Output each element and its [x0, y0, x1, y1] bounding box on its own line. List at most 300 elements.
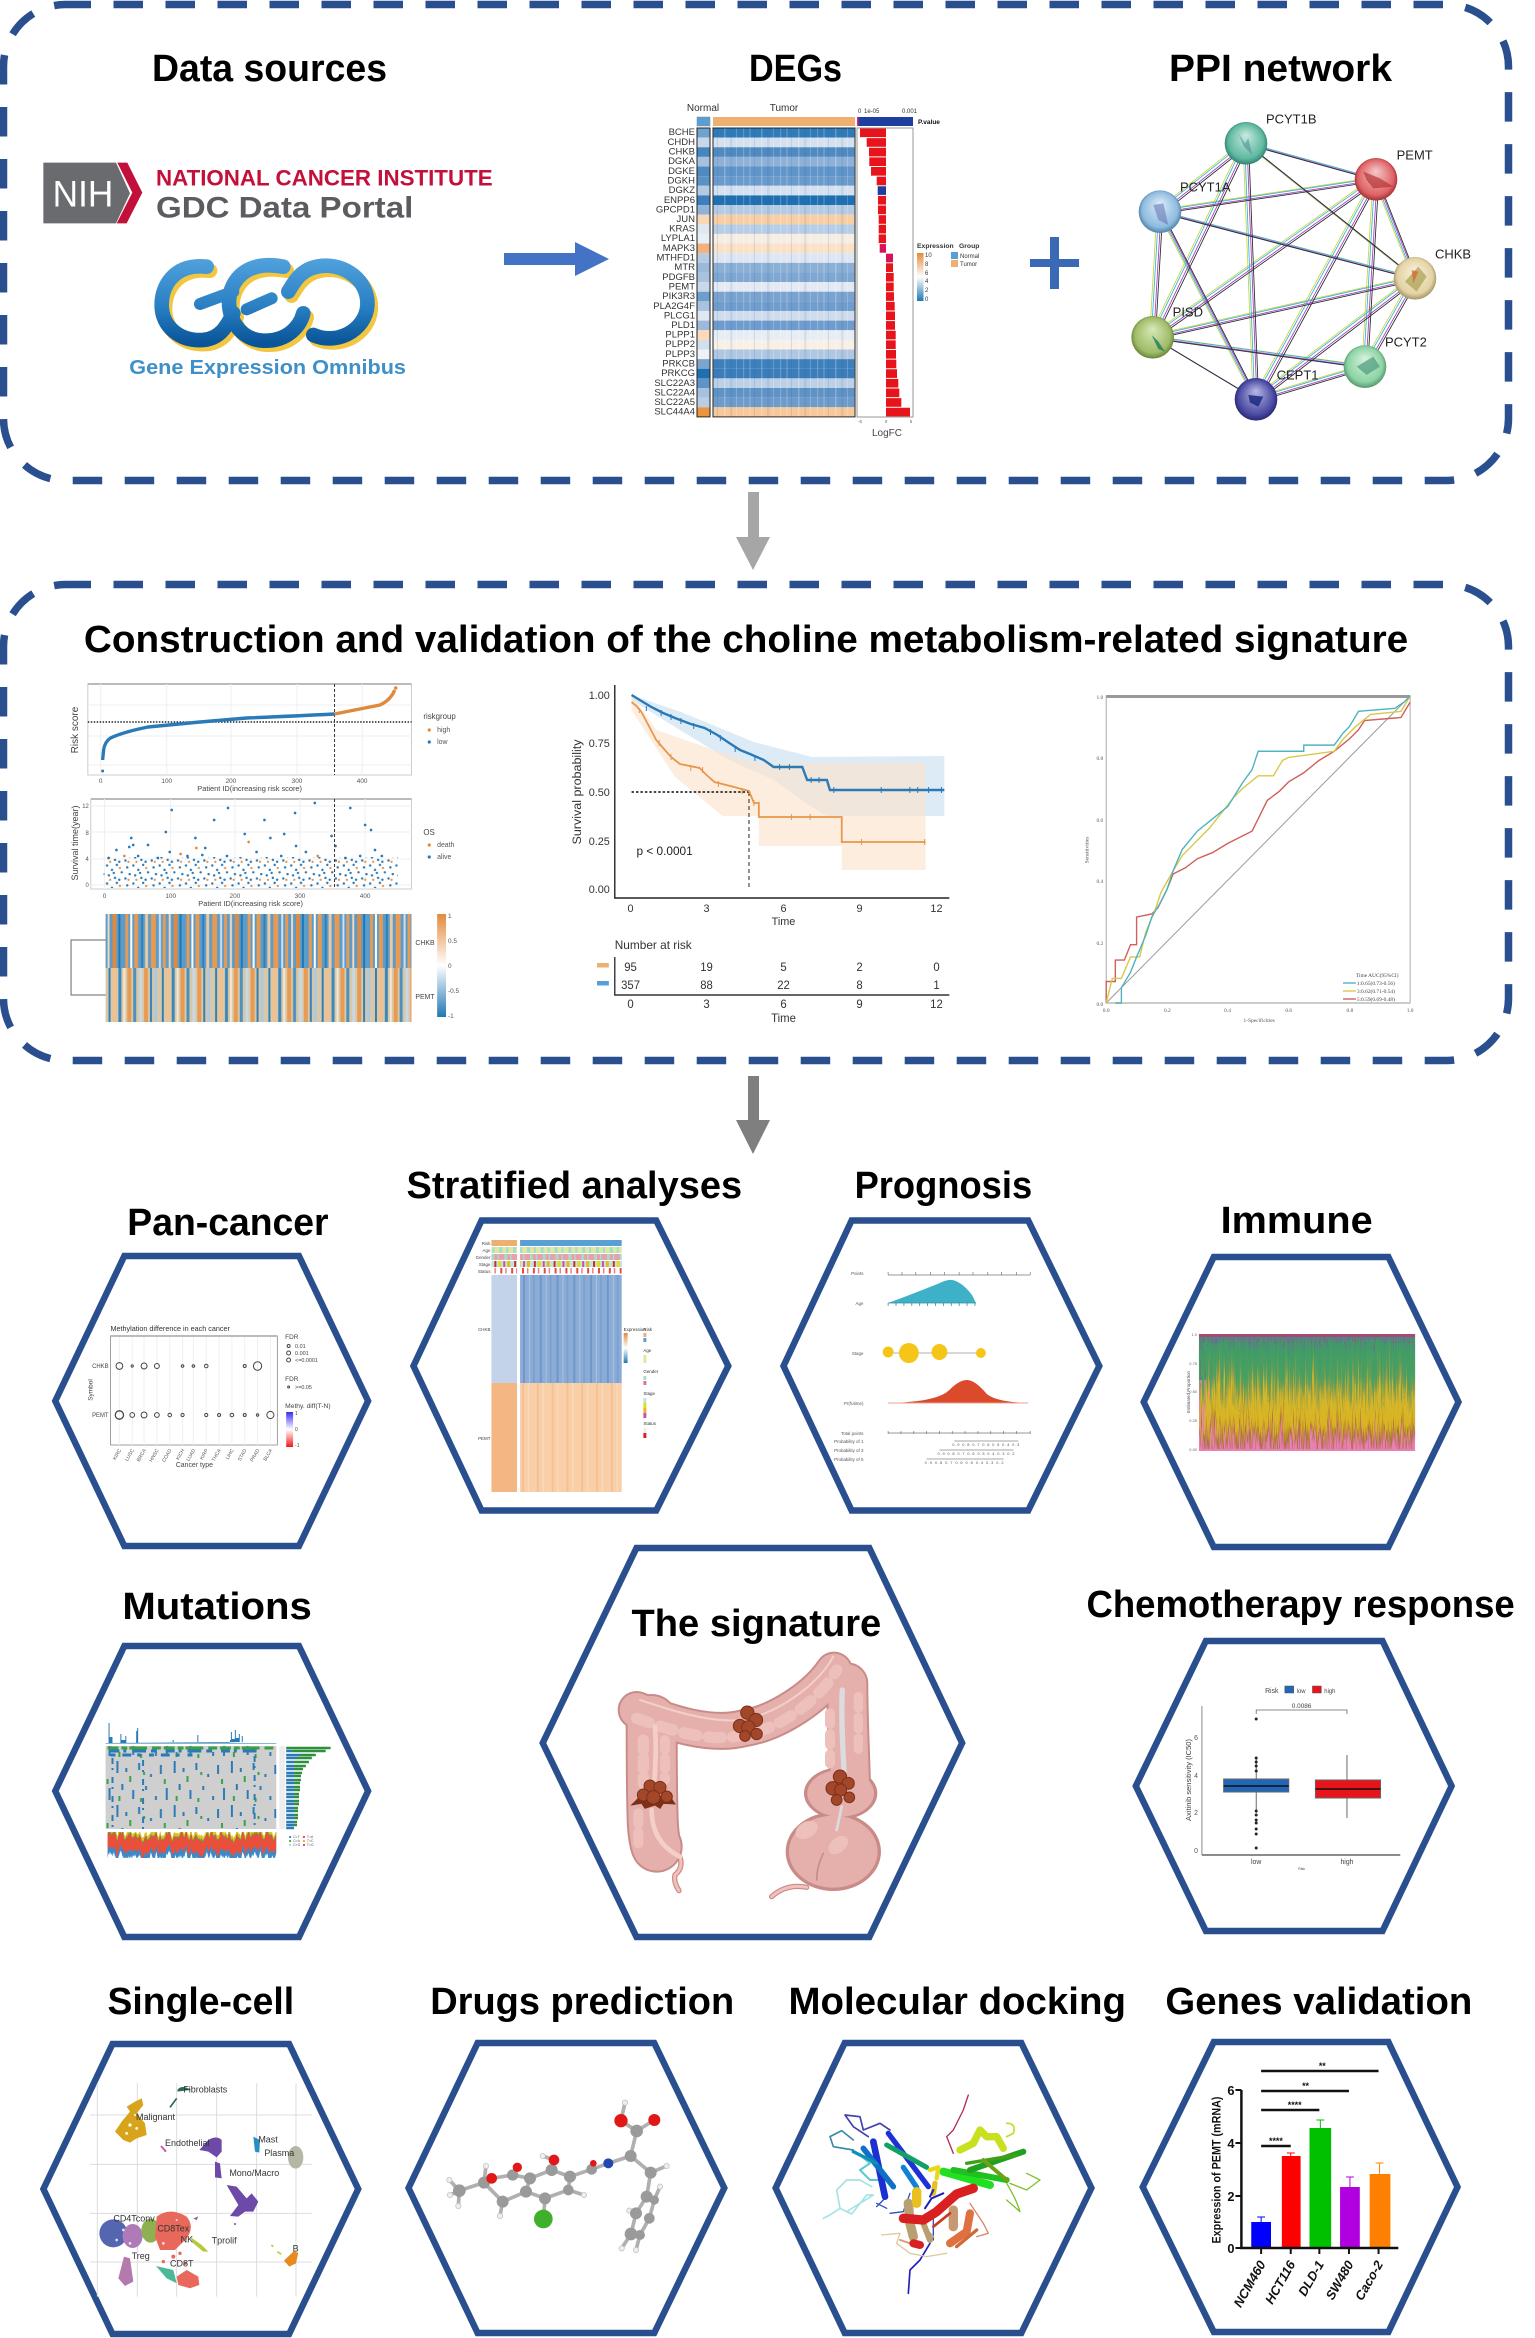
LogFC bars: 5: [910, 419, 913, 424]
chart: PEMT expression bars: 0: [1227, 2241, 1234, 2256]
cluster labels: B: [293, 2244, 299, 2254]
chart: survival time scatter: 200: [230, 893, 241, 900]
chart: methylation bubble plot: COAD: [161, 1448, 174, 1463]
chart: stratified heatmap: Risk: [482, 1241, 491, 1246]
panel: stratified analyses: [407, 1164, 742, 1510]
chart: immune infiltration stacked bars: [1186, 1334, 1416, 1451]
logo: GEO Gene Expression Omnibus: Gene Expression Omnibus: [129, 356, 406, 379]
chart: PEMT expression bars: 4: [1227, 2136, 1235, 2151]
P value bar: [857, 109, 940, 126]
chart: nomogram: Stage: [852, 1351, 864, 1356]
node labels: PCYT1A: [1180, 180, 1231, 195]
chart: stratified heatmap: Stage: [479, 1262, 491, 1267]
chart: risk score curve: 0: [99, 778, 103, 785]
bubble legend: 0: [295, 1427, 298, 1433]
heatmap legend: Age: [643, 1348, 652, 1353]
LogFC bars: -5: [858, 419, 862, 424]
chart: survival time scatter: 12: [82, 804, 89, 810]
chart: Kaplan-Meier survival curve: 0: [628, 903, 634, 915]
table: number at risk: 8: [856, 980, 863, 992]
logo: GEO Gene Expression Omnibus: [129, 265, 406, 379]
cluster labels: [113, 2085, 299, 2269]
chart: ROC curves: 1-Specificities: [1244, 1017, 1275, 1024]
chart: Kaplan-Meier survival curve: 0.25: [589, 836, 610, 848]
gene row labels: SLC44A4: [654, 406, 695, 418]
node labels: PCYT2: [1385, 335, 1427, 350]
heading: the signature: The signature: [632, 1602, 881, 1644]
chart: oncoplot: T>A: [307, 1835, 314, 1839]
hydrogen atoms: [447, 2100, 669, 2253]
gene row labels: BCHE: [669, 127, 695, 138]
panel: the signature: [543, 1548, 962, 1937]
panel: chemotherapy response: [1086, 1583, 1515, 1931]
cluster labels: Mono/Macro: [229, 2168, 279, 2178]
table: number at risk: 6: [780, 999, 787, 1011]
tumours: [632, 1706, 855, 1808]
chart: ROC curves: 0.8: [1347, 1008, 1354, 1014]
chart: risk score curve: Patient ID(increasing risk score): [197, 784, 303, 793]
heading: construction and validation: Construction and validation of the choline metabolism-related signature: [84, 618, 1408, 660]
cluster labels: NK: [181, 2234, 193, 2244]
chart: PEMT expression bars: [1210, 2061, 1398, 2310]
bubble legend: 1: [295, 1411, 298, 1417]
chart: PEMT expression bars: HCT116: [1262, 2257, 1299, 2307]
heatmap legend: [917, 243, 979, 303]
chart: Kaplan-Meier survival curve: [570, 685, 949, 928]
chart: ROC curves: 3:0.62(0.71-0.54): [1357, 988, 1395, 995]
chart: immune infiltration stacked bars: Estimated Proportion: [1186, 1370, 1191, 1413]
heading: DEGs: DEGs: [749, 48, 842, 90]
chart: ROC curves: 1.0: [1096, 695, 1104, 701]
chart: Kaplan-Meier survival curve: 0.00: [589, 884, 610, 896]
heatmap legend: Tumor: [960, 262, 977, 268]
chart: risk score curve: riskgroup: [423, 712, 456, 721]
icon: colon with tumours: [632, 1657, 881, 1897]
cluster labels: Tprolif: [212, 2235, 237, 2245]
heatmap rows: [697, 128, 855, 417]
heatmap annotation: Normal: [687, 103, 719, 114]
panel: molecular docking: [776, 1980, 1126, 2333]
bubble legend: Methy. diff(T-N): [285, 1403, 331, 1410]
chart: methylation bubble plot: PRAD: [249, 1448, 261, 1463]
chart: risk score curve: Risk score: [70, 706, 81, 753]
node labels: CEPT1: [1277, 367, 1319, 382]
helices: tan and yellow: [908, 2203, 913, 2237]
chart: methylation bubble plot: LUSC: [124, 1448, 136, 1463]
chart: immune infiltration stacked bars: 0.50: [1189, 1389, 1198, 1394]
chart: ROC curves: 0.4: [1096, 879, 1104, 885]
chart: survival time scatter: 4: [86, 857, 89, 863]
chart: Kaplan-Meier survival curve: 0.50: [589, 787, 610, 799]
chart: stratified heatmap: CHKB: [478, 1327, 490, 1332]
gene row labels: DGKZ: [669, 185, 695, 196]
gene row labels: [653, 127, 696, 418]
chart: oncoplot: T>G: [307, 1843, 314, 1847]
chart: methylation bubble plot: [88, 1326, 331, 1469]
haustra highlights: [637, 1670, 858, 1858]
gene row labels: DGKA: [668, 156, 696, 167]
table: number at risk: 95: [624, 962, 637, 974]
chart: gene expression heatmap: -0.5: [448, 988, 459, 995]
chart: gene expression heatmap: [71, 913, 459, 1022]
bubble legend: >=0.05: [295, 1385, 312, 1391]
gene row labels: PIK3R3: [662, 291, 695, 302]
table: number at risk: 12: [930, 999, 943, 1011]
chart: ROC curves: 1.0: [1407, 1008, 1414, 1014]
gene row labels: MTR: [674, 262, 695, 273]
myeloid cluster: [199, 2137, 258, 2225]
chart: drug sensitivity boxplot: 2: [1194, 1810, 1198, 1817]
LogFC bars: 0: [885, 419, 888, 424]
chart: immune infiltration stacked bars: 1.0: [1191, 1332, 1198, 1337]
chart: survival time scatter: OS: [423, 828, 435, 837]
chart: drug sensitivity boxplot: 0: [1194, 1848, 1198, 1855]
panel: pan-cancer: [55, 1201, 368, 1546]
chart: methylation bubble plot: LIHC: [225, 1448, 236, 1461]
chart: risk score curve: 300: [292, 778, 303, 785]
top mutation burden bars: [106, 1723, 253, 1743]
chart: risk score curve: high: [437, 727, 450, 734]
panel contents: [70, 618, 1414, 1025]
chart: stratified heatmap: Age: [483, 1248, 491, 1253]
chart: nomogram: 0.9 0.8 0.7 0.6 0.5 0.4 0.3 0.2: [937, 1451, 1014, 1456]
icon: ball-and-stick molecule: [447, 2100, 669, 2253]
node labels: PISD: [1173, 305, 1203, 320]
gene row labels: CHKB: [669, 146, 695, 158]
heatmap legend: 10: [925, 253, 932, 259]
chart: ROC curves: 0.6: [1096, 818, 1104, 824]
heatmap legend: 4: [925, 279, 929, 285]
chart: ROC curves: 0.0: [1103, 1008, 1110, 1014]
gene row labels: PDGFB: [662, 272, 695, 283]
gene row labels: SLC22A3: [654, 378, 695, 389]
chart: ROC curves: Sensitivities: [1084, 837, 1090, 863]
chart: Kaplan-Meier survival curve: 3: [704, 903, 710, 915]
panel: single-cell: [43, 1980, 358, 2334]
bubble legend: FDR: [285, 1334, 299, 1341]
table: number at risk: 88: [700, 980, 713, 992]
P value bar: 0: [858, 109, 862, 115]
chart: oncoplot: [99, 1723, 331, 1858]
chart: PEMT expression bars: ****: [1288, 2100, 1302, 2110]
chart: ROC curves: 1:0.65(0.73-0.56): [1357, 980, 1395, 987]
ligand: [925, 2190, 943, 2208]
chart: ROC curves: 0.4: [1224, 1008, 1231, 1014]
heatmap legend: 2: [925, 288, 929, 294]
table: number at risk: 1: [933, 980, 940, 992]
gene row labels: MAPK3: [663, 243, 695, 254]
arrow: first panel to second panel: [736, 492, 770, 570]
bubble legend: 0.001: [295, 1351, 309, 1357]
chart: PEMT expression bars: SW480: [1323, 2257, 1357, 2302]
gene row labels: SLC22A4: [654, 388, 695, 398]
chart: stratified heatmap: Gender: [476, 1255, 491, 1260]
bubble legend: [285, 1334, 331, 1449]
gene row labels: PEMT: [669, 282, 695, 292]
chart: Kaplan-Meier survival curve: 12: [930, 903, 943, 915]
chart: drug sensitivity boxplot: Risk: [1298, 1867, 1305, 1871]
chart: ROC curves: 0.0: [1096, 1002, 1104, 1008]
gene row labels: PLPP1: [665, 330, 695, 340]
table: number at risk: 0: [933, 962, 940, 974]
table: number at risk: 19: [700, 962, 713, 974]
chart: gene expression heatmap: CHKB: [415, 940, 435, 947]
chart: methylation bubble plot: CHKB: [92, 1364, 109, 1370]
chart: oncoplot: C>T: [293, 1835, 301, 1839]
chart: drug sensitivity boxplot: high: [1340, 1859, 1354, 1866]
chart: survival time scatter: alive: [437, 854, 451, 861]
bonds: [449, 2103, 667, 2250]
arrow: data sources to DEGs: [504, 242, 609, 276]
gene row labels: SLC22A5: [654, 397, 695, 408]
panel: genes validation: [1143, 1980, 1472, 2332]
gene row labels: PLA2G4F: [653, 301, 695, 312]
chart: drug sensitivity boxplot: [1184, 1686, 1400, 1871]
colon body: [637, 1671, 878, 1888]
variant proportions: [99, 1832, 286, 1858]
chart: oncoplot: C>G: [293, 1843, 301, 1847]
chart: methylation bubble plot: KIRC: [112, 1448, 123, 1461]
chart: nomogram: Points: [851, 1271, 864, 1276]
chart: stratified heatmap: [476, 1240, 659, 1492]
chart: drug sensitivity boxplot: 4: [1194, 1773, 1198, 1780]
chart: ROC curves: 0.6: [1285, 1008, 1292, 1014]
gene row labels: MTHFD1: [656, 252, 695, 264]
chart: PEMT expression bars: Expression of PEMT (mRNA): [1210, 2096, 1224, 2244]
LogFC bars: [857, 128, 913, 439]
chart: ROC curves: Time AUC(95%CI): [1356, 972, 1399, 979]
beta strands: blue domain: [888, 2133, 928, 2187]
chart: survival time scatter: 0: [103, 893, 107, 900]
chart: survival time scatter: 8: [86, 831, 89, 837]
chart: Kaplan-Meier survival curve: p < 0.0001: [636, 844, 693, 858]
gene row labels: DGKE: [668, 166, 695, 177]
chart: risk score curve: low: [437, 739, 448, 746]
chart: nomogram: 0.9 0.8 0.7 0.6 0.5 0.4 0.3: [952, 1442, 1020, 1447]
cluster labels: Plasma: [264, 2148, 294, 2158]
logo: NIH GDC Data Portal: NIH: [53, 173, 113, 215]
chart: survival time scatter: 400: [360, 893, 371, 900]
table: number at risk: 22: [777, 980, 790, 992]
table: number at risk: Number at risk: [615, 938, 692, 952]
heatmap annotation: [687, 103, 855, 126]
table: number at risk: 2: [856, 962, 863, 974]
chart: nomogram: 0.9 0.8 0.7 0.6 0.5 0.4 0.3 0.2: [925, 1460, 1004, 1465]
beta strands: green domain: [943, 2172, 990, 2185]
helix: yellow-green: [960, 2130, 1003, 2150]
chart: PEMT expression bars: NCM460: [1230, 2257, 1269, 2310]
nodes: [1131, 122, 1436, 421]
colon outlines: [637, 1671, 881, 1891]
node labels: PCYT1B: [1266, 111, 1317, 126]
chart: PEMT expression bars: **: [1319, 2061, 1326, 2071]
chart: risk score curve: [70, 683, 456, 793]
chart: drug sensitivity boxplot: 0.0086: [1292, 1703, 1312, 1710]
chart: survival time scatter: 0: [86, 883, 89, 889]
chart: methylation bubble plot: KICH: [175, 1448, 186, 1461]
gene row labels: CHDH: [668, 137, 695, 148]
P value bar: 0.001: [902, 109, 918, 115]
node labels: [1173, 111, 1471, 382]
chart: risk score curve: 200: [226, 778, 237, 785]
chart: methylation bubble plot: THCA: [211, 1447, 223, 1463]
heading: data sources: Data sources: [152, 48, 387, 90]
chart: Kaplan-Meier survival curve: 6: [781, 903, 787, 915]
heatmap legend: [624, 1327, 659, 1438]
chart: ROC curves: 0.2: [1164, 1008, 1171, 1014]
chart: methylation bubble plot: LUAD: [185, 1448, 197, 1463]
table: number at risk: Time: [771, 1013, 796, 1025]
chart: risk score curve: 100: [161, 778, 173, 785]
chart: nomogram: Probability of 1: [834, 1439, 864, 1444]
chart: survival time scatter: Survival time(year): [70, 805, 80, 880]
chart: Kaplan-Meier survival curve: 0.75: [589, 738, 610, 750]
chart: methylation bubble plot: PEMT: [92, 1413, 109, 1419]
bubble legend: <=0.0001: [295, 1358, 318, 1364]
P value bar: P.value: [918, 119, 940, 126]
gene row labels: PRKCG: [661, 368, 695, 379]
panel: stratified analyses: Stratified analyses: [407, 1164, 742, 1206]
cluster labels: CD4Tconv: [113, 2214, 155, 2224]
carbon atoms: [453, 2125, 659, 2240]
chart: survival time scatter: death: [437, 842, 455, 849]
chart: stratified heatmap: PEMT: [478, 1436, 491, 1441]
chart: DEG heatmap with LogFC bars: [653, 103, 979, 439]
chart: nomogram: Total points: [841, 1431, 864, 1436]
error bars: [1257, 2217, 1265, 2222]
cluster labels: CD8Tex: [157, 2224, 190, 2234]
chart: ROC curves: 0.2: [1096, 941, 1104, 947]
table: number at risk: 357: [621, 980, 640, 992]
chart: drug sensitivity boxplot: low: [1251, 1859, 1262, 1866]
panel: immune: Immune: [1221, 1199, 1373, 1241]
chart: risk score curve: 400: [357, 778, 368, 785]
chart: PEMT expression bars: ****: [1269, 2136, 1283, 2146]
malignant cluster: [115, 2098, 147, 2143]
gene row labels: DGKH: [668, 176, 695, 186]
bowel seams: [640, 1657, 844, 1880]
chart: nomogram: Probability of 5: [834, 1457, 864, 1462]
table: number at risk: [597, 938, 949, 1025]
heatmap legend: 0: [925, 297, 929, 303]
gene row labels: PLCG1: [664, 310, 695, 322]
chart: methylation bubble plot: Cancer type: [176, 1462, 213, 1469]
significance bars: [1261, 2071, 1379, 2146]
chart: survival time scatter: [70, 798, 455, 908]
gene row labels: ENPP6: [664, 195, 695, 206]
loops: [823, 2180, 873, 2218]
blue curve: [632, 695, 944, 790]
gene row labels: JUN: [677, 214, 695, 225]
heatmap legend: Gender: [643, 1369, 659, 1374]
chart: methylation bubble plot: HNSC: [148, 1448, 161, 1463]
chart: gene expression heatmap: 1: [448, 913, 452, 920]
bubble legend: 0.01: [295, 1344, 306, 1350]
chart: methylation bubble plot: BLCA: [262, 1447, 274, 1462]
helix: red: [903, 2188, 973, 2220]
heatmap legend: Status: [643, 1421, 657, 1426]
gene row labels: PLPP3: [665, 349, 695, 360]
panel: drugs prediction: [409, 1980, 734, 2333]
chart: oncoplot: C>A: [293, 1839, 301, 1843]
chart: drug sensitivity boxplot: 6: [1194, 1735, 1198, 1742]
chart: gene expression heatmap: PEMT: [415, 994, 435, 1001]
chart: survival time scatter: 300: [295, 893, 306, 900]
chart: survival time scatter: 100: [165, 893, 176, 900]
chart: nomogram: [834, 1271, 1030, 1465]
panel: prognosis: [784, 1164, 1099, 1510]
chart: UMAP clusters: [90, 2083, 312, 2297]
chart: survival time scatter: Patient ID(increasing risk score): [198, 899, 304, 908]
gene row labels: PLPP2: [665, 339, 695, 350]
chart: immune infiltration stacked bars: 0.75: [1189, 1361, 1198, 1366]
helix: orange: [950, 2213, 970, 2243]
panel: chemotherapy response: Chemotherapy response: [1086, 1583, 1515, 1625]
chart: PEMT expression bars: **: [1302, 2081, 1310, 2091]
chart: immune infiltration stacked bars: 0.00: [1189, 1447, 1198, 1452]
chart: methylation bubble plot: KIRP: [199, 1447, 210, 1461]
icon: protein-ligand ribbon structure: [823, 2095, 1040, 2293]
cluster labels: Fibroblasts: [183, 2085, 228, 2095]
cluster labels: Mast: [258, 2135, 278, 2145]
heatmap legend: Expression: [917, 243, 954, 250]
chart: PPI network: [1131, 111, 1471, 421]
chart: drug sensitivity boxplot: Axitinib sensitivity (IC50): [1184, 1738, 1193, 1821]
cluster labels: CD8T: [170, 2259, 194, 2269]
panel: genes validation: Genes validation: [1165, 1980, 1472, 2022]
boxplot legend: Risk: [1265, 1688, 1279, 1695]
panel: mutations: Mutations: [122, 1585, 312, 1627]
lymphoid clusters: [99, 2219, 127, 2247]
heatmap legend: 8: [925, 262, 929, 268]
heatmap legend: Stage: [643, 1391, 656, 1396]
boxplot legend: [1265, 1686, 1335, 1695]
panel: data sources, DEGs and PPI network: [4, 4, 1508, 480]
orange curve: [632, 702, 926, 842]
boxplot legend: low: [1297, 1689, 1306, 1695]
table: number at risk: 5: [780, 962, 787, 974]
table: number at risk: 3: [703, 999, 710, 1011]
chart: PEMT expression bars: DLD-1: [1295, 2258, 1327, 2299]
panel: mutations: [55, 1585, 368, 1937]
cluster labels: Treg: [132, 2251, 150, 2261]
chart: gene expression heatmap: 0.5: [448, 938, 457, 945]
chart: nomogram: Age: [856, 1301, 864, 1306]
bars: [1251, 2222, 1271, 2248]
chart: immune infiltration stacked bars: 0.25: [1189, 1418, 1198, 1423]
node labels: PEMT: [1397, 147, 1433, 162]
node labels: CHKB: [1435, 246, 1471, 261]
chart: methylation bubble plot: STAD: [237, 1448, 249, 1462]
logo: NIH GDC Data Portal: GDC Data Portal: [156, 192, 413, 225]
plus sign: [1030, 237, 1079, 289]
table: number at risk: 9: [856, 999, 863, 1011]
panel: single-cell: Single-cell: [108, 1980, 294, 2022]
panel: prognosis: Prognosis: [855, 1164, 1032, 1206]
bubble legend: FDR: [285, 1376, 299, 1383]
edges: [1150, 142, 1418, 401]
panel: drugs prediction: Drugs prediction: [430, 1980, 734, 2022]
axes: [1241, 2090, 1398, 2248]
arrow: second panel to analyses: [736, 1076, 770, 1154]
chart: methylation bubble plot: BRCA: [136, 1447, 148, 1463]
chart: ROC curves: 0.8: [1096, 756, 1104, 762]
table: number at risk: 0: [627, 999, 634, 1011]
gene row labels: PLD1: [671, 320, 695, 331]
chart: PEMT expression bars: Caco-2: [1352, 2257, 1386, 2303]
heatmap legend: Risk: [643, 1327, 653, 1332]
heatmap legend: Group: [959, 243, 979, 250]
